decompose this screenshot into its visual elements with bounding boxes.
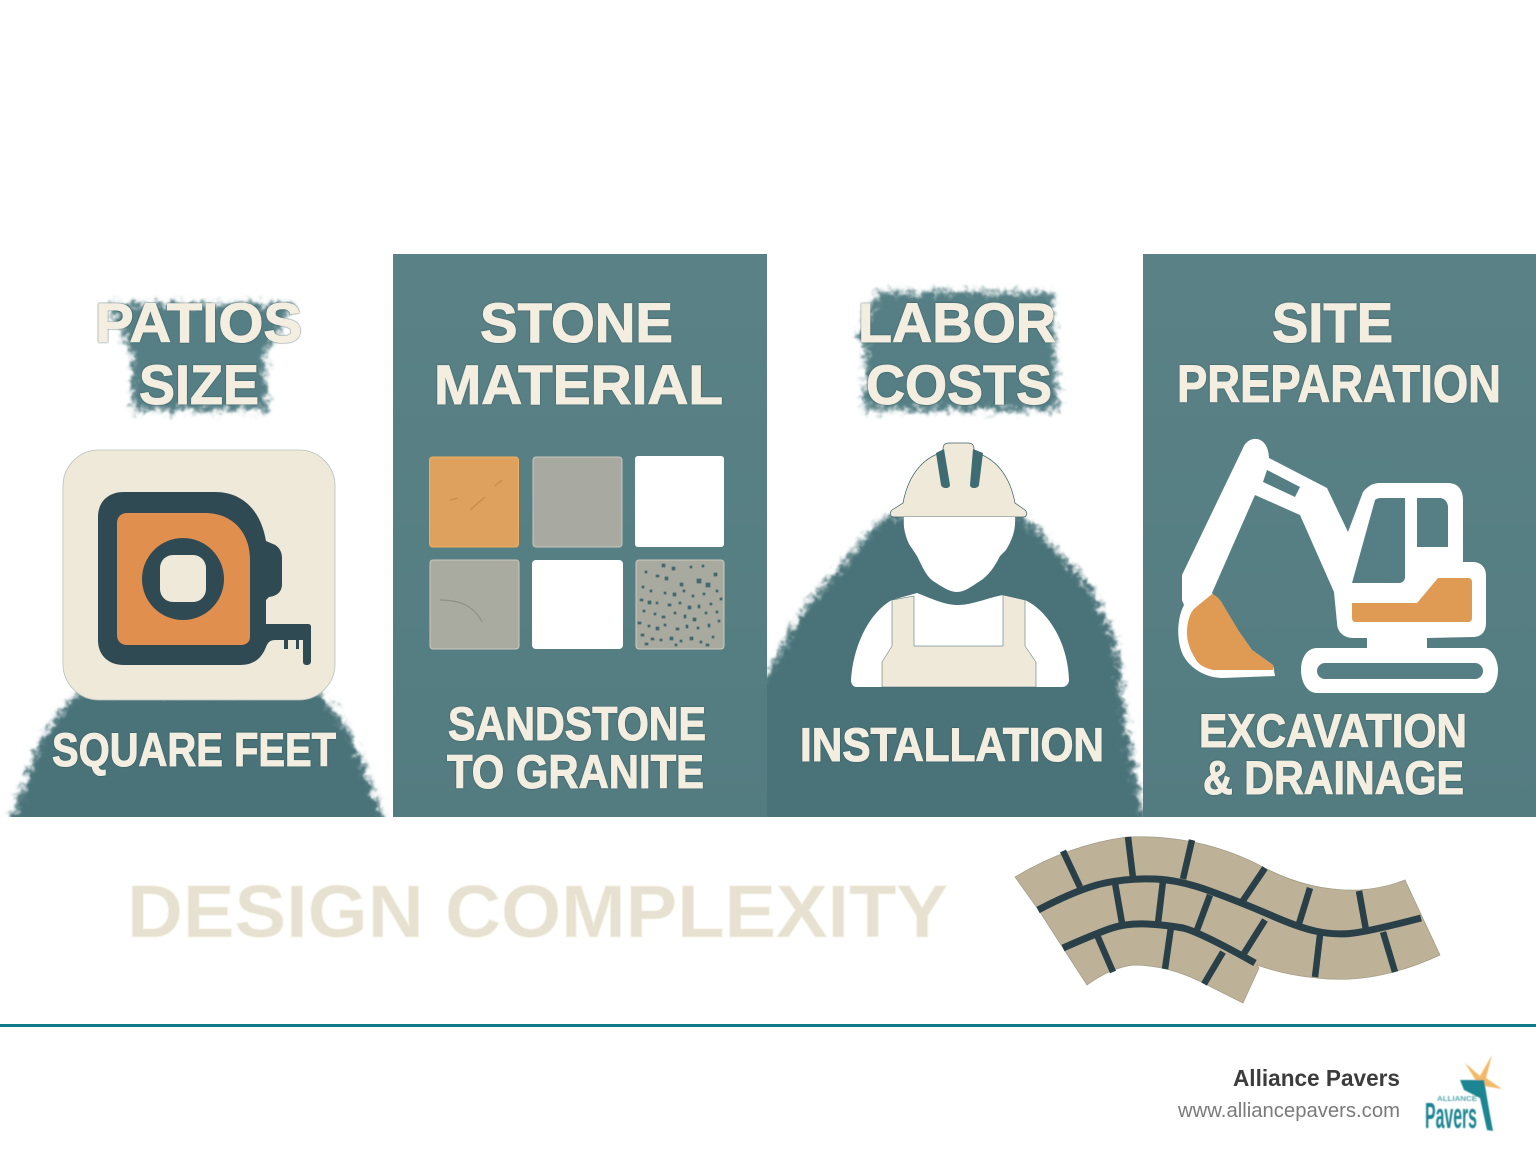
footer: logo — [1425, 1055, 1502, 1136]
label: sandstone to granite — [447, 697, 706, 798]
label: excavation and drainage — [1199, 704, 1467, 804]
heading: patios size: PATIOS — [95, 291, 302, 354]
label: excavation and drainage: EXCAVATION — [1199, 704, 1467, 757]
footer: brand text — [1177, 1065, 1400, 1122]
label: square feet: SQUARE FEET — [52, 723, 336, 776]
icon: tape measure — [63, 450, 335, 700]
icon: construction worker — [851, 443, 1069, 687]
footer: logo: ALLIANCE — [1437, 1096, 1477, 1103]
heading: site preparation: SITE — [1272, 291, 1393, 354]
panel: stone material — [393, 254, 767, 817]
heading backdrop: labor costs — [856, 292, 1058, 410]
icon: excavator — [1178, 439, 1498, 693]
heading: stone material — [434, 291, 723, 416]
illustration: curved paver path — [1015, 837, 1440, 1003]
label: sandstone to granite: TO GRANITE — [447, 745, 704, 798]
heading: stone material: STONE — [480, 291, 673, 354]
label backdrop: installation — [745, 516, 1146, 830]
footer divider — [0, 1024, 1536, 1027]
label backdrop: square feet — [6, 692, 388, 830]
label: installation: INSTALLATION — [800, 718, 1104, 771]
heading: patios size: SIZE — [139, 353, 259, 416]
heading: patios size — [95, 291, 302, 416]
panel: patios size — [6, 291, 388, 830]
heading: labor costs — [858, 291, 1056, 416]
footer: brand text: www.alliancepavers.com — [1177, 1100, 1400, 1122]
panel: labor costs — [745, 291, 1146, 830]
heading: site preparation — [1177, 291, 1501, 414]
label: excavation and drainage: & DRAINAGE — [1203, 751, 1464, 804]
heading backdrop: patios size — [110, 304, 294, 410]
heading: stone material: MATERIAL — [434, 353, 723, 416]
stone swatches — [430, 456, 724, 649]
heading: design complexity: DESIGN COMPLEXITY — [127, 870, 948, 953]
footer: brand text: Alliance Pavers — [1233, 1065, 1400, 1091]
heading: labor costs: LABOR — [858, 291, 1056, 354]
heading: labor costs: COSTS — [866, 353, 1052, 416]
panel: site preparation — [1143, 254, 1536, 817]
label: sandstone to granite: SANDSTONE — [448, 697, 706, 750]
